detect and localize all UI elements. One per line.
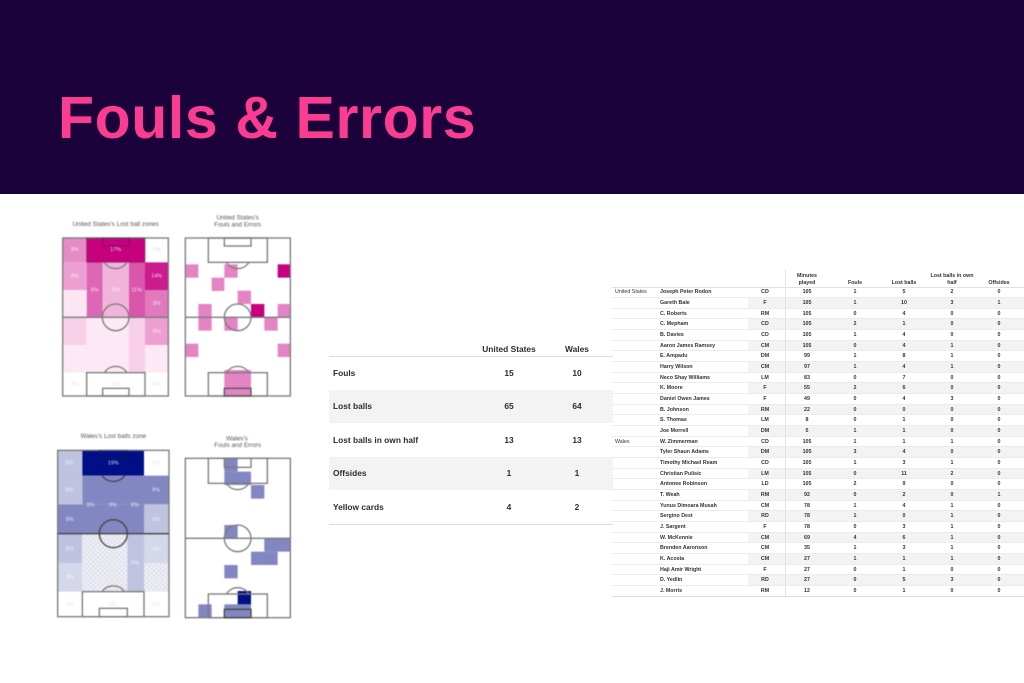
rows: United States: 0	[951, 385, 953, 391]
rows: Wales: Sergino Dest	[660, 513, 693, 519]
rows: Wales: 1	[854, 513, 856, 519]
rows: Wales: D. Yedlin	[660, 577, 682, 583]
rows: United States: 0	[854, 417, 856, 423]
rows: United States: LM	[761, 417, 769, 423]
rows: Wales: 0	[998, 503, 1000, 509]
rows: Wales: Antonee Robinson	[660, 481, 707, 487]
rows: Wales: 27	[804, 577, 810, 583]
rows: Wales: 78	[804, 503, 810, 509]
percentage labels: 5%	[131, 560, 139, 566]
rows: Wales: 1	[854, 460, 856, 466]
rows: United States: 1	[951, 364, 953, 370]
player table header: Minutes	[797, 273, 817, 279]
rows: United States: 55	[804, 385, 810, 391]
rows: Wales: 0	[998, 481, 1000, 487]
percentage labels: 9%	[153, 301, 161, 307]
heat map cells	[58, 450, 169, 592]
percentage labels: 9%	[87, 502, 95, 508]
rows: United States: 1	[854, 353, 856, 359]
rows: Wales: J. Sargent	[660, 524, 686, 530]
rows: Wales: 0	[998, 535, 1000, 541]
rows: United States: 1	[854, 332, 856, 338]
rows: United States: 0	[951, 321, 953, 327]
rows: Wales: 69	[804, 535, 810, 541]
percentage labels: 0%	[153, 247, 161, 253]
rows: United States: 0	[854, 343, 856, 349]
percentage labels: 0%	[71, 382, 79, 388]
rows: United States: 105	[803, 332, 811, 338]
percentage labels: 9%	[71, 247, 79, 253]
rows: United States: 0	[998, 417, 1000, 423]
rows: Wales: 0	[854, 492, 856, 498]
rows: Wales: 4	[903, 449, 905, 455]
row: lost balls in own half: 13	[504, 434, 514, 444]
rows: Wales: RM	[761, 588, 769, 594]
panel: Wales fouls and errors	[185, 436, 290, 618]
rows: Wales: 0	[854, 471, 856, 477]
rows: Wales: 105	[803, 439, 811, 445]
rows: United States: Neco Shay Williams	[660, 375, 710, 381]
rows: Wales: 0	[854, 577, 856, 583]
rows: Wales: K. Acosta	[660, 556, 684, 562]
row: lost balls in own half: 13	[572, 434, 582, 444]
rows: Wales: 1	[951, 524, 953, 530]
rows: United States: 5	[903, 289, 905, 295]
rows: United States: Harry Wilson	[660, 364, 693, 370]
rows: Wales: 3	[903, 524, 905, 530]
rows: Wales: CM	[761, 556, 769, 562]
row: yellow cards: Yellow cards	[333, 502, 384, 512]
rows: Wales: 1	[998, 492, 1000, 498]
rows: United States: LM	[761, 375, 769, 381]
rows: Wales: 2	[951, 471, 953, 477]
rows: United States: 2	[854, 385, 856, 391]
rows: Wales: 1	[854, 503, 856, 509]
rows: United States: 1	[903, 417, 905, 423]
percentage labels: 11%	[131, 287, 142, 293]
rows: Wales: 4	[903, 503, 905, 509]
rows: Wales: RM	[761, 492, 769, 498]
rows: Wales: CD	[761, 460, 769, 466]
percentage labels: 8%	[131, 502, 139, 508]
rows: Wales: 0	[951, 449, 953, 455]
rows: Wales: 1	[951, 513, 953, 519]
percentage labels: 14%	[151, 273, 162, 279]
summary header row: Wales	[565, 344, 589, 354]
percentage labels: 9%	[152, 488, 160, 494]
pitch markings	[63, 238, 168, 396]
rows: Wales: Yunus Dimoara Musah	[660, 503, 717, 509]
rows: Wales: 1	[854, 439, 856, 445]
rows: Wales: 3	[903, 545, 905, 551]
percentage labels: 19%	[108, 461, 119, 467]
panel: Wales lost balls zone	[58, 433, 169, 617]
percentage labels: 3%	[66, 575, 74, 581]
row: yellow cards: 4	[507, 502, 511, 512]
title: Fouls & Errors	[58, 84, 476, 150]
rows: United States: 1	[998, 300, 1000, 306]
rows: Wales: 12	[804, 588, 810, 594]
rows: United States: C. Mepham	[660, 321, 688, 327]
player table header: half	[947, 280, 957, 286]
rows: Wales: 6	[903, 535, 905, 541]
rows: Wales: CM	[761, 535, 769, 541]
rows: United States: 0	[998, 321, 1000, 327]
rows: Wales: 2	[903, 492, 905, 498]
rows: United States: 0	[854, 396, 856, 402]
row: lost balls	[329, 390, 613, 423]
rows: United States: CD	[761, 289, 769, 295]
summary table	[329, 344, 613, 525]
row: fouls	[333, 368, 582, 378]
heat map cells	[63, 238, 168, 373]
rows: United States: 1	[951, 343, 953, 349]
percentage labels: 5%	[66, 461, 74, 467]
rows: United States: CM	[761, 364, 769, 370]
rows: Wales: 3	[903, 460, 905, 466]
rows: Wales: 35	[804, 545, 810, 551]
rows: United States: 22	[804, 407, 810, 413]
rows: Wales: Brenden Aaronson	[660, 545, 707, 551]
rows: Wales: Tyler Shaun Adams	[660, 449, 709, 455]
rows: United States: 83	[804, 375, 810, 381]
rows: United States: 0	[998, 407, 1000, 413]
panel: United States fouls and errors	[185, 214, 290, 396]
rows: United States: 0	[903, 407, 905, 413]
rows: Wales: 105	[803, 460, 811, 466]
rows: Wales: CD	[761, 439, 769, 445]
percentage labels: 5%	[112, 287, 120, 293]
row: lost balls: Lost balls	[333, 401, 372, 411]
rows: Wales: W. McKennie	[660, 535, 693, 541]
rows: Wales: Christian Pulisic	[660, 471, 702, 477]
rows: United States: 0	[998, 353, 1000, 359]
rows: United States: 0	[998, 375, 1000, 381]
rows: Wales: 0	[998, 449, 1000, 455]
rows: Wales: 0	[998, 556, 1000, 562]
heading: Wales fouls and errors: Fouls and Errors	[214, 442, 261, 449]
rows: United States: B. Davies	[660, 332, 684, 338]
rows: Wales: 0	[998, 471, 1000, 477]
rows: United States: C. Roberts	[660, 311, 687, 317]
percentage labels	[66, 461, 160, 608]
rows: United States: 4	[903, 311, 905, 317]
percentage labels: 0%	[66, 602, 74, 608]
rows: United States: 0	[951, 428, 953, 434]
column divider	[785, 269, 786, 596]
pitch markings	[58, 450, 169, 617]
row: offsides: 1	[507, 468, 511, 478]
percentage labels: 6%	[71, 273, 79, 279]
percentage labels: 9%	[109, 502, 117, 508]
rows: United States: 1	[951, 353, 953, 359]
percentage labels: 0%	[152, 461, 160, 467]
rows: United States: 97	[804, 364, 810, 370]
rows: Wales: 0	[951, 567, 953, 573]
rows: United States: Gareth Bale	[660, 300, 690, 306]
rows: Wales: 105	[803, 471, 811, 477]
rows: Wales: 1	[951, 460, 953, 466]
rows: Wales: 1	[903, 588, 905, 594]
rows: United States: 0	[998, 343, 1000, 349]
percentage labels: 17%	[110, 247, 121, 253]
player table header: Lost balls in own	[931, 273, 973, 279]
rows: United States: 1	[903, 321, 905, 327]
rows: Wales: LD	[761, 481, 769, 487]
rows: United States: 0	[998, 311, 1000, 317]
summary header row	[329, 335, 613, 357]
rows: Wales: 4	[854, 535, 856, 541]
rows: United States: 1	[854, 300, 856, 306]
summary header row: United States	[482, 344, 536, 354]
rows: United States: 4	[903, 343, 905, 349]
row: offsides	[329, 457, 613, 490]
row: fouls: 10	[572, 368, 582, 378]
heading: United States fouls and errors: Fouls and Errors	[214, 221, 261, 228]
foul squares	[185, 264, 290, 396]
rows: Wales: 0	[998, 439, 1000, 445]
rows: Wales: Haji Amir Wright	[660, 567, 701, 573]
rows: United States: 2	[951, 289, 953, 295]
rows: Wales: 1	[903, 439, 905, 445]
rows: Wales: 5	[903, 577, 905, 583]
rows: United States: 2	[854, 321, 856, 327]
rows: Wales: 1	[854, 545, 856, 551]
rows: Wales: J. Morris	[660, 588, 682, 594]
rows: Wales: 0	[998, 567, 1000, 573]
rows: Wales: 2	[854, 481, 856, 487]
rows: United States: 3	[951, 396, 953, 402]
row: offsides: 1	[575, 468, 579, 478]
rows: Wales: 0	[854, 567, 856, 573]
row: lost balls in own half	[333, 434, 582, 444]
rows: United States: DM	[761, 353, 769, 359]
rows: Wales: 1	[903, 556, 905, 562]
rows: Wales: 0	[951, 492, 953, 498]
rows: United States: S. Thomas	[660, 417, 687, 423]
rows: Wales: Wales	[615, 439, 630, 445]
rows: United States: 0	[854, 311, 856, 317]
rows: Wales: 27	[804, 556, 810, 562]
rows: United States: Aaron James Ramsey	[660, 343, 715, 349]
percentage labels: 0%	[152, 602, 160, 608]
rows: Wales: 3	[951, 577, 953, 583]
rows: Wales: 1	[951, 503, 953, 509]
rows: United States: 3	[951, 300, 953, 306]
rows: United States: F	[763, 300, 767, 306]
rows: Wales: 1	[951, 439, 953, 445]
rows: Wales: 0	[903, 513, 905, 519]
rows: Wales: CM	[761, 545, 769, 551]
percentage labels: 5%	[152, 517, 160, 523]
rows: United States: United States	[615, 289, 647, 295]
rows: Wales: 92	[804, 492, 810, 498]
rows: United States: Joseph Peter Rodon	[660, 289, 712, 295]
percentage labels	[71, 247, 162, 388]
rows: Wales: W. Zimmerman	[660, 439, 698, 445]
rows: United States: 0	[854, 375, 856, 381]
rows: Wales: 1	[903, 567, 905, 573]
rows: United States: 4	[903, 396, 905, 402]
percentage labels: 0%	[112, 382, 120, 388]
row: lost balls in own half: Lost balls in own half	[333, 434, 418, 444]
rows: Wales: 0	[854, 524, 856, 530]
rows: Wales: 0	[854, 588, 856, 594]
rows: United States: 1	[854, 364, 856, 370]
row: fouls: Fouls	[333, 368, 355, 378]
rows: United States: 4	[903, 332, 905, 338]
rows: United States: 0	[951, 417, 953, 423]
rows: United States: 0	[998, 289, 1000, 295]
rows: United States: F	[763, 396, 767, 402]
rows: United States: CD	[761, 332, 769, 338]
rows: Wales: 3	[854, 449, 856, 455]
rows: United States: F	[763, 385, 767, 391]
rows: Wales: 0	[951, 481, 953, 487]
rows: United States: B. Johnson	[660, 407, 689, 413]
row: lost balls: 65	[504, 401, 514, 411]
rows: United States: 1	[854, 289, 856, 295]
rows: Wales: 1	[951, 556, 953, 562]
row: yellow cards	[329, 490, 613, 525]
rows: United States	[612, 289, 1024, 437]
rows: Wales: 0	[998, 513, 1000, 519]
pitch markings	[185, 458, 290, 618]
rows: United States: DM	[761, 428, 769, 434]
rows: Wales: 11	[901, 471, 907, 477]
rows: United States: Joe Morrell	[660, 428, 688, 434]
heading: Wales fouls and errors: Wales's	[226, 436, 248, 443]
heading: United States lost ball zones: United States's Lost ball zones	[72, 221, 159, 228]
header band	[0, 0, 1024, 194]
player table header: Fouls	[848, 280, 862, 286]
rows: Wales: RD	[761, 513, 769, 519]
rows: Wales: F	[763, 567, 767, 573]
percentage labels: 5%	[66, 546, 74, 552]
rows: United States: CD	[761, 321, 769, 327]
rows: United States: 8	[806, 417, 808, 423]
rows: United States: 105	[803, 311, 811, 317]
percentage labels: 0%	[109, 601, 117, 607]
rows: Wales: 105	[803, 449, 811, 455]
rows: Wales: 105	[803, 481, 811, 487]
rows: United States: 0	[998, 385, 1000, 391]
rows: Wales: 78	[804, 513, 810, 519]
rows: Wales: 1	[951, 545, 953, 551]
rows: Wales	[612, 439, 1024, 597]
rows: United States: 0	[951, 375, 953, 381]
rows: United States: RM	[761, 311, 769, 317]
rows: Wales: 1	[854, 556, 856, 562]
rows: United States: 4	[903, 364, 905, 370]
rows: United States: E. Ampadu	[660, 353, 687, 359]
rows: United States: RM	[761, 407, 769, 413]
rows: Wales: Timothy Michael Ream	[660, 460, 717, 466]
heading: United States fouls and errors: United States's	[216, 214, 259, 221]
row: offsides: Offsides	[333, 468, 367, 478]
rows: Wales: 0	[998, 545, 1000, 551]
rows: United States: 0	[998, 332, 1000, 338]
rows: United States: 105	[803, 321, 811, 327]
row: yellow cards: 2	[575, 502, 579, 512]
player table header	[612, 265, 1024, 288]
row: lost balls: 64	[572, 401, 582, 411]
rows: United States: 7	[903, 375, 905, 381]
rows: United States: 0	[951, 407, 953, 413]
rows: Wales: RD	[761, 577, 769, 583]
rows: United States: 0	[951, 332, 953, 338]
heading: Wales lost balls zone: Wales's Lost balls zone	[80, 433, 147, 440]
rows: United States: 0	[854, 407, 856, 413]
rows: United States: 0	[998, 364, 1000, 370]
percentage labels: 5%	[66, 488, 74, 494]
rows: Wales: LM	[761, 471, 769, 477]
rows: Wales: T. Weah	[660, 492, 680, 498]
rows: United States: 105	[803, 343, 811, 349]
player table	[612, 269, 1024, 597]
pitch markings	[185, 238, 290, 396]
player table header: played	[799, 280, 815, 286]
rows: United States: 5	[806, 428, 808, 434]
rows: Wales: 0	[998, 577, 1000, 583]
percentage labels: 8%	[153, 329, 161, 335]
rows: United States: 1	[854, 428, 856, 434]
rows: United States: 0	[951, 311, 953, 317]
rows: Wales: F	[763, 524, 767, 530]
panel: United States lost ball zones	[63, 221, 168, 396]
rows: United States: CM	[761, 343, 769, 349]
percentage labels: 0%	[153, 382, 161, 388]
percentage labels: 9%	[66, 517, 74, 523]
rows: United States: 99	[804, 353, 810, 359]
rows: Wales: 9	[903, 481, 905, 487]
rows: United States: 6	[903, 385, 905, 391]
rows: Wales: 0	[951, 588, 953, 594]
rows: Wales: 27	[804, 567, 810, 573]
row: fouls: 15	[504, 368, 514, 378]
rows: United States: 0	[998, 396, 1000, 402]
foul squares	[198, 458, 290, 618]
rows: Wales: 1	[951, 535, 953, 541]
rows: Wales: 0	[998, 524, 1000, 530]
rows: United States: K. Moore	[660, 385, 683, 391]
rows: Wales: 78	[804, 524, 810, 530]
rows: United States: 105	[803, 300, 811, 306]
rows: United States: 105	[803, 289, 811, 295]
rows: United States: Daniel Owen James	[660, 396, 710, 402]
rows: Wales: 0	[998, 588, 1000, 594]
percentage labels: 9%	[91, 287, 99, 293]
rows: United States: 10	[901, 300, 907, 306]
rows: United States: 49	[804, 396, 810, 402]
rows: Wales: 0	[998, 460, 1000, 466]
rows: United States: 0	[998, 428, 1000, 434]
player table header: Offsides	[988, 280, 1010, 286]
rows: United States: 8	[903, 353, 905, 359]
rows: Wales: CM	[761, 503, 769, 509]
rows: United States: 1	[903, 428, 905, 434]
rows: Wales: DM	[761, 449, 769, 455]
percentage labels: 3%	[152, 546, 160, 552]
player table header: Lost balls	[892, 280, 916, 286]
